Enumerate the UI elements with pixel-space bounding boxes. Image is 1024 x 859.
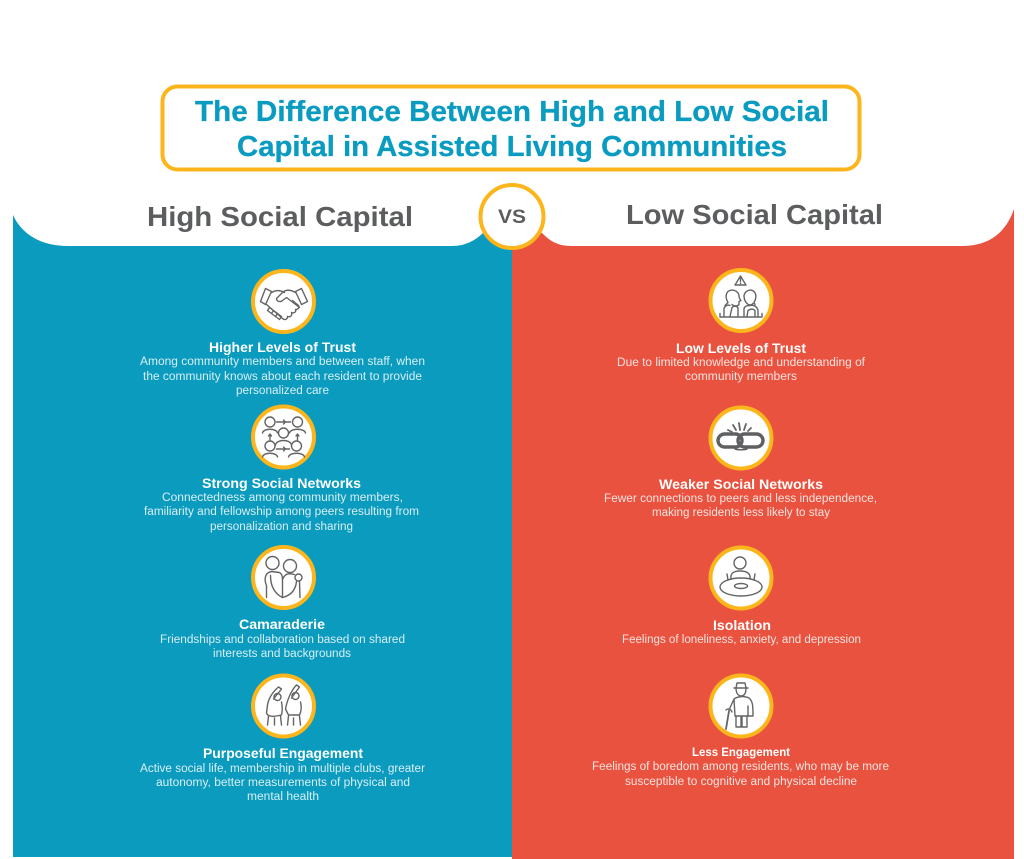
description: mental health bbox=[247, 791, 319, 803]
description: Friendships and collaboration based on shared bbox=[160, 634, 405, 646]
description bbox=[604, 493, 877, 519]
title box: Capital in Assisted Living Communities bbox=[237, 131, 787, 163]
description: personalized care bbox=[236, 385, 329, 397]
vs badge bbox=[480, 185, 544, 248]
icon: two people stretching bbox=[253, 676, 314, 736]
icon: person alone at table bbox=[710, 548, 772, 608]
item: less engagement bbox=[592, 676, 889, 788]
heading: Less Engagement bbox=[692, 747, 790, 759]
description: susceptible to cognitive and physical decline bbox=[625, 776, 857, 788]
description bbox=[144, 492, 419, 533]
description bbox=[160, 634, 405, 660]
description bbox=[592, 761, 889, 788]
description bbox=[140, 356, 425, 397]
icon: elderly person with cane bbox=[710, 676, 772, 736]
heading: Isolation bbox=[713, 618, 771, 633]
heading: Weaker Social Networks bbox=[659, 477, 823, 492]
description: Active social life, membership in multiple clubs, greater bbox=[140, 763, 425, 775]
description: Connectedness among community members, bbox=[162, 492, 403, 504]
item: higher levels of trust bbox=[140, 271, 425, 397]
icon: connected people network bbox=[253, 406, 314, 468]
heading: Low Levels of Trust bbox=[676, 341, 807, 356]
description: Feelings of loneliness, anxiety, and depression bbox=[622, 634, 861, 646]
title box bbox=[162, 86, 860, 170]
description: autonomy, better measurements of physical and bbox=[156, 777, 410, 789]
panel: high social capital background bbox=[13, 215, 512, 857]
heading: Higher Levels of Trust bbox=[209, 340, 357, 355]
icon: broken chain bbox=[710, 408, 772, 468]
icon: handshake bbox=[253, 271, 314, 332]
icon: two friends embracing bbox=[253, 547, 314, 608]
description: Due to limited knowledge and understanding of bbox=[617, 357, 866, 369]
icon: two people back to back with warning sign bbox=[710, 270, 772, 331]
description: making residents less likely to stay bbox=[652, 507, 830, 519]
vs badge: VS bbox=[498, 206, 526, 228]
description: personalization and sharing bbox=[210, 521, 353, 533]
heading: Strong Social Networks bbox=[202, 476, 361, 491]
description: Among community members and between staff, when bbox=[140, 356, 425, 368]
heading: Camaraderie bbox=[239, 617, 326, 632]
panel: low social capital background bbox=[512, 209, 1014, 859]
description: interests and backgrounds bbox=[213, 648, 351, 660]
description: Feelings of boredom among residents, who may be more bbox=[592, 761, 889, 773]
item: weaker social networks bbox=[604, 408, 877, 519]
heading: high social capital: High Social Capital bbox=[147, 201, 413, 232]
heading: Purposeful Engagement bbox=[203, 746, 364, 761]
description: community members bbox=[685, 371, 797, 383]
heading: low social capital: Low Social Capital bbox=[626, 199, 883, 230]
description bbox=[617, 357, 866, 383]
title box: The Difference Between High and Low Social bbox=[195, 96, 829, 128]
item: low levels of trust bbox=[617, 270, 866, 383]
description: Fewer connections to peers and less independence, bbox=[604, 493, 877, 505]
description: familiarity and fellowship among peers resulting from bbox=[144, 506, 419, 518]
description bbox=[140, 763, 425, 803]
item: strong social networks bbox=[144, 406, 419, 533]
item: isolation bbox=[622, 548, 861, 646]
description: the community knows about each resident to provide bbox=[143, 371, 422, 383]
item: camaraderie bbox=[160, 547, 405, 660]
item: purposeful engagement bbox=[140, 676, 425, 803]
